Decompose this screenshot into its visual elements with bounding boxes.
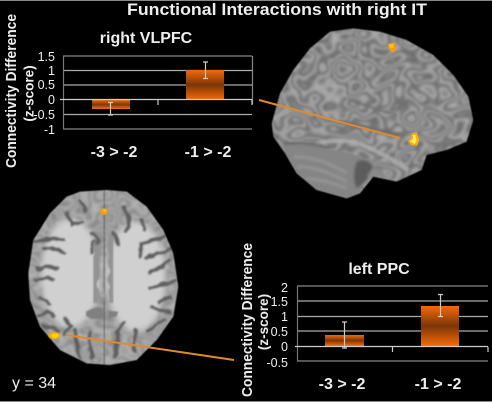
- title: Functional Interactions with right IT: [127, 0, 428, 19]
- activation: frontal blob: [408, 133, 419, 145]
- category labels: -3 > -2: [319, 376, 365, 393]
- brain: axial view: [23, 188, 183, 368]
- tick labels: [266, 281, 288, 370]
- bar chart: left PPC: -1 > -2: [415, 376, 461, 393]
- bar chart: right VLPFC: [4, 14, 252, 168]
- tick labels: 0.5: [271, 325, 288, 339]
- cerebellum and brainstem: [283, 144, 370, 200]
- bar: -1 > -2: [421, 306, 459, 346]
- category labels: -3 > -2: [91, 144, 137, 161]
- white matter: [41, 218, 166, 332]
- y axis title: Connectivity Difference: [240, 243, 256, 397]
- tick labels: 1.5: [38, 50, 55, 64]
- heading: left PPC: left PPC: [348, 261, 410, 278]
- tick labels: [33, 50, 55, 137]
- sylvian fissure and temporal lobe: [317, 100, 407, 168]
- connector: sagittal brain to VLPFC chart: [259, 100, 400, 138]
- sulci right: [113, 207, 175, 357]
- bar: -1 > -2: [186, 70, 224, 100]
- sulci left: [35, 200, 98, 358]
- heading: right VLPFC: right VLPFC: [100, 30, 193, 47]
- tick labels: 1: [48, 64, 55, 78]
- tick labels: -0.5: [33, 108, 55, 122]
- y axis subtitle: (z-score): [22, 65, 36, 122]
- central grey: [95, 233, 112, 303]
- tick labels: -0.5: [266, 356, 288, 370]
- brain: sagittal view: [267, 23, 480, 203]
- activation: parietal blob: [388, 43, 396, 53]
- activation: parietal blob: [48, 332, 60, 339]
- tick labels: 2: [281, 281, 288, 295]
- y axis subtitle: (z-score): [256, 294, 271, 350]
- tick labels: 0: [48, 93, 55, 107]
- tick labels: -1: [44, 123, 55, 137]
- bar chart: left PPC: [240, 243, 488, 397]
- tick labels: 1: [281, 310, 288, 324]
- tick labels: 0: [281, 340, 288, 354]
- label: y = 34: y = 34: [12, 375, 56, 392]
- midline: [103, 190, 106, 365]
- bar: -3 > -2: [92, 100, 130, 109]
- y axis title: Connectivity Difference: [4, 14, 20, 168]
- tick labels: 1.5: [271, 295, 288, 309]
- connector: axial brain to PPC chart: [66, 335, 234, 360]
- bar chart: right VLPFC: -1 > -2: [185, 144, 231, 161]
- tick labels: 0.5: [38, 78, 55, 92]
- bar: -3 > -2: [325, 335, 364, 346]
- activation: medial blob: [100, 208, 108, 215]
